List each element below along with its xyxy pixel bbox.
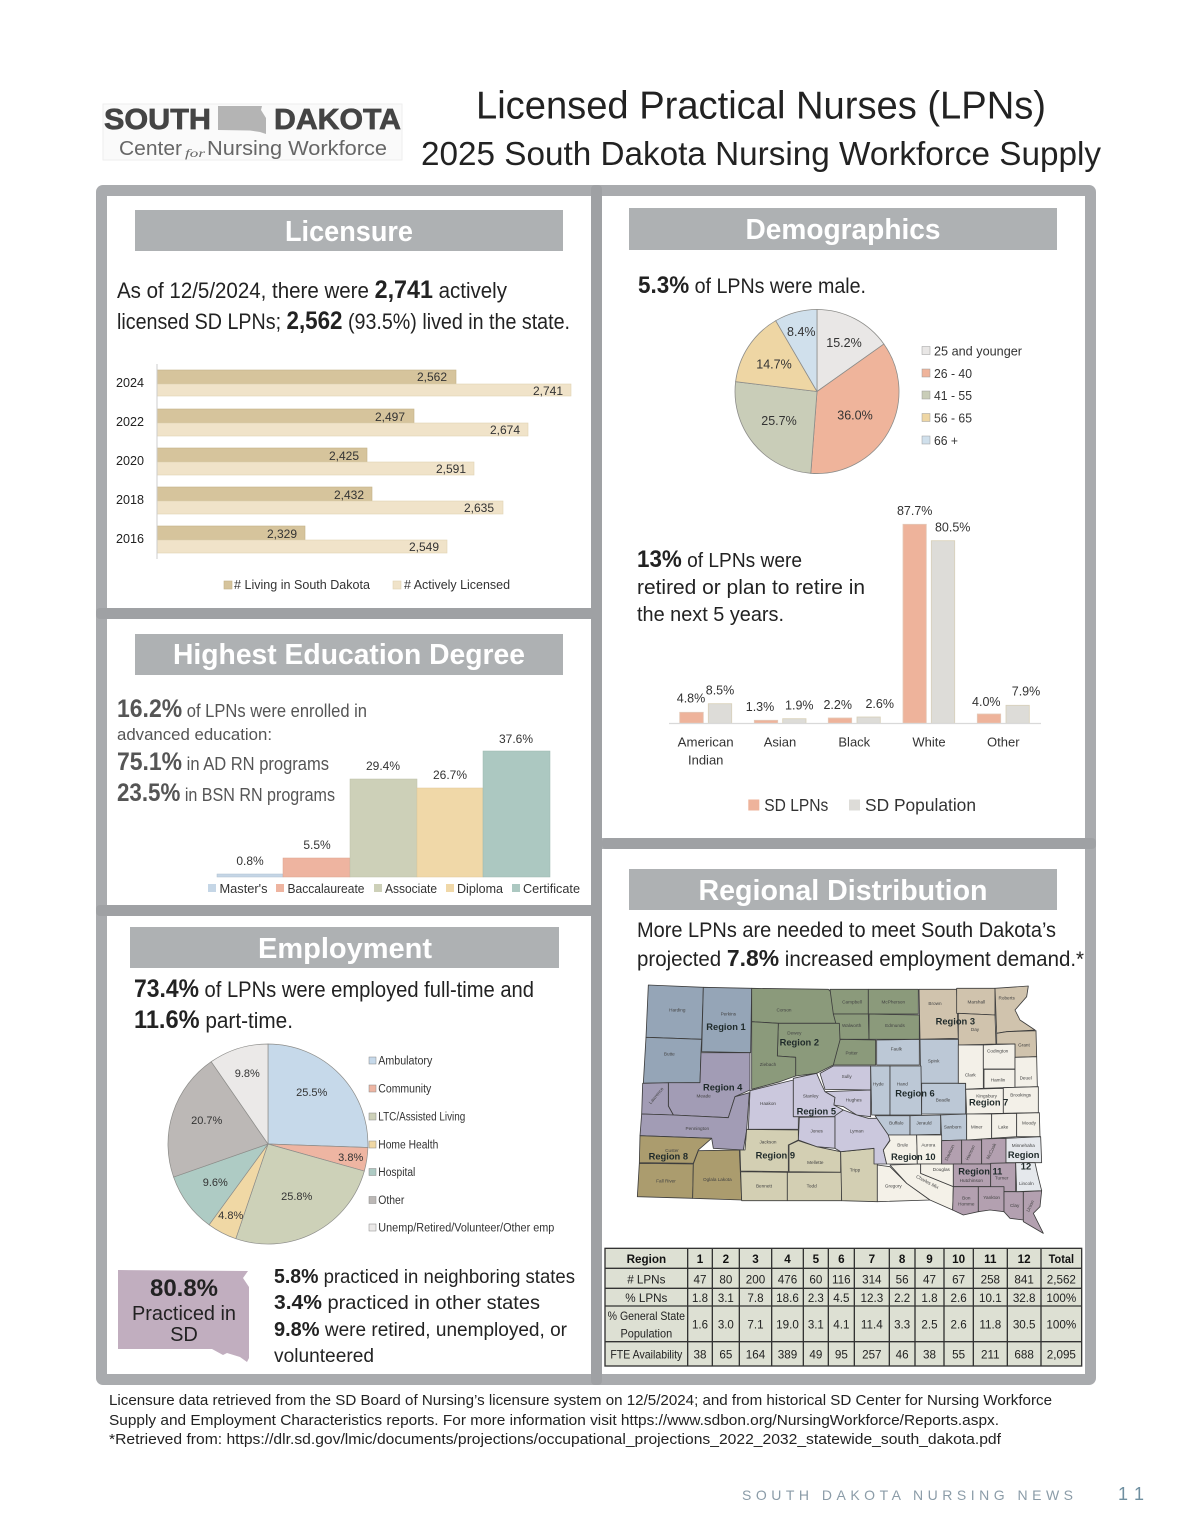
map: South Dakota regions: Edmunds bbox=[885, 1023, 906, 1028]
table: regional supply: Population bbox=[620, 1327, 672, 1340]
table: regional supply: 314 bbox=[862, 1273, 882, 1286]
map: South Dakota regions: Codington bbox=[987, 1049, 1009, 1054]
map: South Dakota regions: Gregory bbox=[885, 1183, 902, 1188]
table: regional supply: 11 bbox=[984, 1253, 997, 1266]
pie chart: employment setting: 9.6% bbox=[203, 1177, 228, 1189]
table: regional supply: Region bbox=[627, 1253, 666, 1266]
table: regional supply: 11.8 bbox=[979, 1319, 1001, 1332]
map: South Dakota regions: Jones bbox=[810, 1129, 824, 1134]
bar chart: race: 2.6% bbox=[865, 697, 894, 711]
map: South Dakota regions: Perkins bbox=[721, 1011, 737, 1016]
text block: licensure summary bbox=[117, 276, 570, 335]
title: 2025 South Dakota Nursing Workforce Supply bbox=[421, 135, 1102, 172]
table: regional supply bbox=[605, 1248, 1082, 1366]
bar chart: race: 4.8% bbox=[677, 692, 705, 706]
table: regional supply: 4.5 bbox=[833, 1292, 849, 1305]
map: South Dakota regions: Hanson bbox=[965, 1144, 976, 1161]
map: South Dakota regions: Region 9 bbox=[756, 1151, 795, 1161]
footnote: Supply and Employment Characteristics reports. For more information visit https://www.sdbon.org/NursingWorkforce/Reports.aspx. bbox=[109, 1413, 999, 1429]
table: regional supply: 200 bbox=[746, 1273, 766, 1286]
map: South Dakota regions: Jackson bbox=[759, 1139, 777, 1144]
heading: regional distribution bbox=[629, 869, 1057, 910]
text block: advanced education: advanced education: bbox=[117, 725, 272, 744]
map: South Dakota regions: Region 5 bbox=[797, 1106, 836, 1116]
map: South Dakota regions: Brookings bbox=[1010, 1093, 1032, 1098]
pie chart: employment setting: 3.8% bbox=[338, 1152, 363, 1164]
logo: South Dakota Center for Nursing Workforce: DAKOTA bbox=[274, 104, 401, 136]
bar chart: degree: 26.7% bbox=[433, 768, 467, 782]
table: regional supply: 1.8 bbox=[692, 1292, 708, 1305]
footnote bbox=[109, 1393, 1052, 1448]
bar chart: race: 1.9% bbox=[785, 698, 814, 712]
table: regional supply: 1.8 bbox=[921, 1292, 938, 1305]
table: regional supply: 4 bbox=[784, 1253, 791, 1266]
heading: demographics: Demographics bbox=[746, 214, 940, 246]
map: South Dakota regions: Haakon bbox=[760, 1101, 776, 1106]
table: regional supply: % LPNs bbox=[625, 1292, 668, 1305]
table: regional supply: 12 bbox=[1018, 1253, 1031, 1266]
table: regional supply: 841 bbox=[1014, 1273, 1034, 1286]
bar chart: licensed vs living in SD: 2,497 bbox=[375, 410, 405, 424]
table: regional supply: 389 bbox=[778, 1348, 797, 1361]
table: regional supply: 11.4 bbox=[861, 1319, 883, 1332]
chart legend: SD LPNs bbox=[764, 795, 829, 815]
table: regional supply: 2.6 bbox=[951, 1319, 967, 1332]
pie legend: age bbox=[922, 344, 1022, 448]
bar chart: race: 87.7% bbox=[897, 504, 932, 518]
text block: practice location: volunteered bbox=[274, 1345, 374, 1367]
logo: South Dakota Center for Nursing Workforce: for bbox=[185, 146, 205, 160]
pie legend: age: 25 and younger bbox=[934, 344, 1022, 358]
table: regional supply: 47 bbox=[694, 1273, 706, 1286]
pie chart: age: 25.7% bbox=[761, 414, 797, 428]
table: regional supply: 2.3 bbox=[808, 1292, 824, 1305]
map: South Dakota regions: Tripp bbox=[850, 1168, 861, 1173]
chart legend bbox=[208, 882, 580, 896]
pie legend: employment setting: Other bbox=[378, 1195, 404, 1207]
bar chart: licensed vs living in SD: 2016 bbox=[116, 532, 144, 546]
map: South Dakota regions: Region 4 bbox=[703, 1082, 743, 1092]
text block: advanced education: 75.1% in AD RN programs bbox=[117, 748, 329, 776]
pie legend: employment setting: Home Health bbox=[378, 1140, 438, 1152]
map: South Dakota regions: Walworth bbox=[842, 1023, 862, 1028]
table: regional supply: 55 bbox=[952, 1348, 965, 1361]
map: South Dakota regions: Yankton bbox=[983, 1195, 1000, 1200]
callout: practiced in SD bbox=[118, 1270, 249, 1362]
table: regional supply: 2 bbox=[723, 1253, 730, 1266]
table: regional supply: 46 bbox=[896, 1348, 909, 1361]
pie legend: employment setting: LTC/Assisted Living bbox=[378, 1112, 465, 1124]
panel: licensure bbox=[107, 196, 591, 608]
table: regional supply: 67 bbox=[952, 1273, 965, 1286]
text block: employment status: 11.6% part-time. bbox=[134, 1006, 293, 1034]
heading: licensure bbox=[135, 210, 563, 251]
map: South Dakota regions: Hutchinson bbox=[960, 1178, 983, 1183]
map: South Dakota regions: Hyde bbox=[873, 1082, 884, 1087]
map: South Dakota regions: Lyman bbox=[850, 1129, 864, 1134]
map: South Dakota regions: Davison bbox=[944, 1144, 956, 1161]
table: regional supply: 3.0 bbox=[718, 1319, 734, 1332]
table: regional supply: 688 bbox=[1014, 1348, 1034, 1361]
map: South Dakota regions: Todd bbox=[807, 1183, 817, 1188]
map: South Dakota regions: Roberts bbox=[999, 996, 1015, 1001]
bar chart: race: 2.2% bbox=[823, 698, 852, 712]
bar chart: race: 1.3% bbox=[746, 700, 774, 714]
map: South Dakota regions: Hand bbox=[897, 1082, 908, 1087]
map: South Dakota regions: Stanley bbox=[803, 1093, 819, 1098]
text block: practice location: 3.4% practiced in other states bbox=[274, 1291, 540, 1314]
map: South Dakota regions: Pennington bbox=[686, 1126, 710, 1131]
bar chart: licensed vs living in SD: 2,329 bbox=[267, 527, 297, 541]
table: regional supply: 116 bbox=[832, 1273, 851, 1286]
map: South Dakota regions: Buffalo bbox=[889, 1121, 904, 1126]
table: regional supply: FTE Availability bbox=[610, 1348, 682, 1361]
map: South Dakota regions: Sully bbox=[842, 1074, 852, 1079]
bar chart: race bbox=[669, 504, 1041, 815]
table: regional supply: 30.5 bbox=[1013, 1319, 1036, 1332]
pie chart: age: 8.4% bbox=[787, 325, 816, 339]
table: regional supply: 100% bbox=[1046, 1319, 1076, 1332]
table: regional supply: 3.3 bbox=[894, 1319, 910, 1332]
bar chart: licensed vs living in SD: 2,432 bbox=[334, 488, 364, 502]
pie legend: age: 56 - 65 bbox=[934, 412, 972, 426]
map: South Dakota regions: Deuel bbox=[1020, 1076, 1032, 1081]
footnote: *Retrieved from: https://dlr.sd.gov/lmic/documents/projections/occupational_projections_2022_2032_statewide_south_dakota.pdf bbox=[109, 1432, 1002, 1448]
table: regional supply: 1 bbox=[697, 1253, 704, 1266]
bar chart: degree: 37.6% bbox=[499, 732, 533, 746]
bar chart: race: Black bbox=[838, 734, 871, 750]
pie chart: age: 15.2% bbox=[826, 336, 862, 350]
pie legend: employment setting: Ambulatory bbox=[378, 1056, 433, 1068]
map: South Dakota regions: Lake bbox=[998, 1124, 1009, 1129]
table: regional supply: 56 bbox=[896, 1273, 909, 1286]
table: regional supply: 8 bbox=[899, 1253, 906, 1266]
map: South Dakota regions: Moody bbox=[1022, 1121, 1037, 1126]
text block: advanced education: 16.2% of LPNs were enrolled in bbox=[117, 695, 367, 723]
map: South Dakota regions bbox=[637, 985, 1043, 1233]
bar chart: degree: 5.5% bbox=[303, 838, 331, 852]
pie legend: age: 41 - 55 bbox=[934, 389, 972, 403]
table: regional supply: 7.1 bbox=[747, 1319, 764, 1332]
table: regional supply: 3.1 bbox=[808, 1319, 824, 1332]
bar chart: degree: 29.4% bbox=[366, 759, 400, 773]
pie legend: employment setting bbox=[369, 1056, 554, 1234]
bar chart: licensed vs living in SD: 2,549 bbox=[409, 540, 439, 554]
table: regional supply: 10 bbox=[952, 1253, 965, 1266]
map: South Dakota regions: Lincoln bbox=[1019, 1181, 1034, 1186]
text block: practice location bbox=[274, 1265, 575, 1367]
heading: regional distribution: Regional Distribution bbox=[698, 875, 988, 907]
map: South Dakota regions: Campbell bbox=[842, 999, 862, 1004]
map: South Dakota regions: Meade bbox=[697, 1094, 711, 1099]
map: South Dakota regions: Fall River bbox=[656, 1178, 676, 1183]
bar chart: licensed vs living in SD: 2,562 bbox=[417, 370, 447, 384]
table: regional supply: 9 bbox=[926, 1253, 933, 1266]
map: South Dakota regions: McPherson bbox=[882, 999, 906, 1004]
map: South Dakota regions: Charles Mix bbox=[915, 1174, 940, 1190]
map: South Dakota regions: Bon bbox=[962, 1195, 971, 1200]
map: South Dakota regions: Oglala Lakota bbox=[703, 1177, 732, 1182]
table: regional supply: 257 bbox=[862, 1348, 882, 1361]
table: regional supply: 2.6 bbox=[951, 1292, 967, 1305]
chart legend: Diploma bbox=[457, 882, 503, 896]
map: South Dakota regions: Corson bbox=[776, 1007, 792, 1012]
bar chart: licensed vs living in SD: 2022 bbox=[116, 415, 144, 429]
bar chart: licensed vs living in SD bbox=[116, 364, 571, 592]
table: regional supply: 47 bbox=[923, 1273, 936, 1286]
bar chart: licensed vs living in SD: 2,674 bbox=[490, 423, 520, 437]
table: regional supply: 476 bbox=[778, 1273, 797, 1286]
chart legend: Certificate bbox=[523, 882, 580, 896]
table: regional supply: 2.5 bbox=[921, 1319, 938, 1332]
map: South Dakota regions: Homme bbox=[958, 1202, 975, 1207]
callout: practiced in SD: Practiced in bbox=[132, 1303, 236, 1325]
text block: retirement bbox=[637, 546, 865, 626]
map: South Dakota regions: Union bbox=[1025, 1199, 1035, 1213]
map: South Dakota regions: McCook bbox=[985, 1142, 997, 1160]
table: regional supply: % General State bbox=[608, 1310, 685, 1323]
map: South Dakota regions: Clay bbox=[1010, 1203, 1020, 1208]
table: regional supply: 2,095 bbox=[1047, 1348, 1076, 1361]
chart legend: Master's bbox=[220, 882, 268, 896]
heading: licensure: Licensure bbox=[285, 216, 413, 248]
page footer: 11 bbox=[1118, 1484, 1144, 1504]
chart legend: Baccalaureate bbox=[288, 882, 365, 896]
text block: employment demand bbox=[637, 919, 1084, 971]
pie chart: employment setting: 9.8% bbox=[235, 1068, 260, 1080]
map: South Dakota regions: Region 3 bbox=[936, 1017, 975, 1027]
map: South Dakota regions: Region 6 bbox=[895, 1088, 935, 1098]
bar chart: race: 4.0% bbox=[972, 695, 1001, 709]
table: regional supply: 7.8 bbox=[747, 1292, 764, 1305]
text block: licensure summary: As of 12/5/2024, there were 2,741 actively bbox=[117, 276, 507, 304]
pie legend: employment setting: Community bbox=[378, 1084, 432, 1096]
text block: employment demand: projected 7.8% increased employment demand.* bbox=[637, 945, 1084, 971]
heading: employment: Employment bbox=[258, 933, 432, 965]
bar chart: licensed vs living in SD: 2,635 bbox=[464, 501, 494, 515]
bar chart: licensed vs living in SD: 2024 bbox=[116, 376, 144, 390]
pie chart: employment setting: 4.8% bbox=[218, 1210, 243, 1222]
map: South Dakota regions: Harding bbox=[669, 1007, 686, 1012]
bar chart: race: 8.5% bbox=[706, 684, 734, 698]
table: regional supply: Total bbox=[1049, 1253, 1074, 1266]
map: South Dakota regions: Kingsbury bbox=[976, 1093, 998, 1098]
table: regional supply: # LPNs bbox=[627, 1273, 666, 1286]
map: South Dakota regions: Clark bbox=[965, 1073, 976, 1078]
table: regional supply: 65 bbox=[719, 1348, 732, 1361]
pie chart: employment setting: 20.7% bbox=[191, 1115, 223, 1127]
footnote: Licensure data retrieved from the SD Board of Nursing’s licensure system on 12/5/2024; and from historical SD Center for Nursing Workforce bbox=[109, 1393, 1052, 1409]
pie chart: age: 14.7% bbox=[756, 358, 792, 372]
map: South Dakota regions: Region 10 bbox=[891, 1152, 936, 1162]
callout: practiced in SD: 80.8% bbox=[150, 1275, 218, 1302]
table: regional supply: 5 bbox=[813, 1253, 820, 1266]
map: South Dakota regions: Faulk bbox=[891, 1046, 903, 1051]
table: regional supply: 95 bbox=[835, 1348, 848, 1361]
map: South Dakota regions: Spink bbox=[928, 1058, 940, 1063]
map: South Dakota regions: 12 bbox=[1021, 1162, 1031, 1172]
table: regional supply: 18.6 bbox=[776, 1292, 799, 1305]
table: regional supply: 4.1 bbox=[833, 1319, 849, 1332]
table: regional supply: 2,562 bbox=[1047, 1273, 1076, 1286]
map: South Dakota regions: Douglas bbox=[933, 1167, 951, 1172]
pie chart: employment setting: 25.8% bbox=[281, 1191, 313, 1203]
pie legend: age: 66 + bbox=[934, 434, 958, 448]
heading: employment bbox=[130, 927, 559, 968]
pie legend: employment setting: Hospital bbox=[378, 1167, 415, 1179]
title bbox=[421, 84, 1102, 172]
table: regional supply: 3 bbox=[752, 1253, 759, 1266]
text block: male share: 5.3% of LPNs were male. bbox=[638, 272, 866, 299]
pie chart: employment setting: 25.5% bbox=[296, 1087, 328, 1099]
table: regional supply: 60 bbox=[809, 1273, 823, 1286]
bar chart: race: Indian bbox=[688, 752, 723, 768]
map: South Dakota regions: Brown bbox=[928, 1001, 942, 1006]
text block: retirement: 13% of LPNs were bbox=[637, 546, 802, 573]
map: South Dakota regions: Ziebach bbox=[760, 1062, 777, 1067]
map: South Dakota regions: Minnehaha bbox=[1012, 1143, 1035, 1148]
pie legend: age: 26 - 40 bbox=[934, 367, 972, 381]
map: South Dakota regions: Marshall bbox=[968, 999, 985, 1004]
logo: South Dakota Center for Nursing Workforce: SOUTH bbox=[104, 104, 211, 136]
callout: practiced in SD: SD bbox=[170, 1324, 198, 1346]
bar chart: licensed vs living in SD: 2,425 bbox=[329, 449, 359, 463]
heading: demographics bbox=[629, 208, 1057, 250]
chart legend: SD Population bbox=[865, 795, 976, 815]
table: regional supply: 3.1 bbox=[718, 1292, 734, 1305]
chart legend: # Actively Licensed bbox=[404, 578, 510, 592]
map: South Dakota regions: Brule bbox=[897, 1143, 909, 1148]
table: regional supply: 32.8 bbox=[1013, 1292, 1036, 1305]
map: South Dakota regions: Turner bbox=[995, 1175, 1009, 1180]
logo: South Dakota Center for Nursing Workforce bbox=[103, 104, 402, 160]
map: South Dakota regions: Potter bbox=[845, 1050, 858, 1055]
table: regional supply: 2.2 bbox=[894, 1292, 910, 1305]
table: regional supply: 38 bbox=[923, 1348, 936, 1361]
table: regional supply: 100% bbox=[1046, 1292, 1076, 1305]
map: South Dakota regions: Region bbox=[1008, 1150, 1040, 1160]
panel: employment bbox=[107, 916, 591, 1374]
bar chart: race: 80.5% bbox=[935, 520, 970, 534]
map: South Dakota regions: Region 7 bbox=[969, 1098, 1008, 1108]
heading: highest education degree: Highest Education Degree bbox=[173, 639, 525, 671]
text block: licensure summary: licensed SD LPNs; 2,562 (93.5%) lived in the state. bbox=[117, 307, 570, 335]
map: South Dakota regions: Sanborn bbox=[944, 1124, 962, 1129]
table: regional supply: 19.0 bbox=[776, 1319, 799, 1332]
table: regional supply: 6 bbox=[838, 1253, 845, 1266]
map: South Dakota regions: Mellette bbox=[807, 1160, 824, 1165]
page footer: SOUTH DAKOTA NURSING NEWS bbox=[742, 1487, 1073, 1503]
chart legend: Associate bbox=[385, 882, 437, 896]
map: South Dakota regions: Custer bbox=[665, 1148, 679, 1153]
map: South Dakota regions: Dewey bbox=[787, 1031, 802, 1036]
map: South Dakota regions: Hamlin bbox=[991, 1078, 1006, 1083]
panel: demographics bbox=[602, 196, 1085, 838]
pie chart: employment setting bbox=[168, 1044, 368, 1244]
bar chart: race: Asian bbox=[764, 734, 796, 750]
pie chart: age bbox=[735, 310, 899, 474]
bar chart: race: American bbox=[678, 734, 734, 750]
table: regional supply: 38 bbox=[694, 1348, 706, 1361]
map: South Dakota regions: Hughes bbox=[846, 1097, 862, 1102]
text block: employment status bbox=[134, 975, 534, 1034]
chart legend bbox=[748, 795, 976, 815]
title: Licensed Practical Nurses (LPNs) bbox=[476, 84, 1046, 128]
map: South Dakota regions: Aurora bbox=[921, 1143, 936, 1148]
heading: highest education degree bbox=[135, 634, 563, 675]
table: regional supply: 7 bbox=[869, 1253, 875, 1266]
pie chart: age: 36.0% bbox=[837, 408, 873, 422]
bar chart: licensed vs living in SD: 2,591 bbox=[436, 462, 466, 476]
bar chart: race: 7.9% bbox=[1012, 684, 1040, 698]
text block: advanced education bbox=[117, 695, 367, 807]
bar chart: race: Other bbox=[987, 734, 1020, 750]
logo: South Dakota Center for Nursing Workforce: Nursing Workforce bbox=[207, 138, 387, 160]
panel: regional distribution bbox=[602, 849, 1085, 1374]
table: regional supply: 49 bbox=[809, 1348, 822, 1361]
table: regional supply: 164 bbox=[746, 1348, 766, 1361]
text block: practice location: 5.8% practiced in neighboring states bbox=[274, 1265, 575, 1288]
map: South Dakota regions: Jerauld bbox=[916, 1121, 932, 1126]
map: South Dakota regions: Bennett bbox=[756, 1183, 773, 1188]
text block: employment demand: More LPNs are needed to meet South Dakota’s bbox=[637, 919, 1056, 942]
chart legend: # Living in South Dakota bbox=[234, 578, 370, 592]
bar chart: licensed vs living in SD: 2018 bbox=[116, 493, 144, 507]
text block: advanced education: 23.5% in BSN RN programs bbox=[117, 779, 335, 807]
map: South Dakota regions: Region 1 bbox=[706, 1022, 746, 1032]
chart legend bbox=[224, 578, 510, 592]
text block: retirement: retired or plan to retire in bbox=[637, 576, 865, 599]
table: regional supply: 1.6 bbox=[692, 1319, 708, 1332]
map: South Dakota regions: Lawrence bbox=[648, 1086, 665, 1105]
text block: practice location: 9.8% were retired, unemployed, or bbox=[274, 1318, 567, 1341]
table: regional supply: 12.3 bbox=[860, 1292, 883, 1305]
map: South Dakota regions: Region 11 bbox=[958, 1167, 1002, 1177]
table: regional supply: 80 bbox=[719, 1273, 733, 1286]
map: South Dakota regions: Grant bbox=[1018, 1043, 1031, 1048]
text block: employment status: 73.4% of LPNs were employed full-time and bbox=[134, 975, 534, 1003]
panel: highest education degree bbox=[107, 619, 591, 905]
bar chart: race: White bbox=[912, 734, 946, 750]
pie legend: employment setting: Unemp/Retired/Volunteer/Other emp bbox=[378, 1222, 554, 1234]
bar chart: degree: 0.8% bbox=[236, 854, 264, 868]
table: regional supply: 211 bbox=[981, 1348, 1000, 1361]
map: South Dakota regions: Beadle bbox=[936, 1097, 951, 1102]
map: South Dakota regions: Miner bbox=[971, 1124, 983, 1129]
logo: South Dakota Center for Nursing Workforce: Center bbox=[119, 138, 182, 160]
bar chart: degree bbox=[208, 732, 580, 896]
map: South Dakota regions: Day bbox=[971, 1027, 980, 1032]
map: South Dakota regions: Region 2 bbox=[780, 1037, 819, 1047]
page footer bbox=[742, 1484, 1144, 1504]
map: South Dakota regions: Region 8 bbox=[649, 1151, 688, 1161]
bar chart: licensed vs living in SD: 2020 bbox=[116, 454, 144, 468]
map: South Dakota regions: Butte bbox=[664, 1052, 675, 1057]
table: regional supply: 10.1 bbox=[979, 1292, 1002, 1305]
table: regional supply: 258 bbox=[981, 1273, 1000, 1286]
text block: retirement: the next 5 years. bbox=[637, 603, 784, 626]
bar chart: licensed vs living in SD: 2,741 bbox=[533, 384, 563, 398]
